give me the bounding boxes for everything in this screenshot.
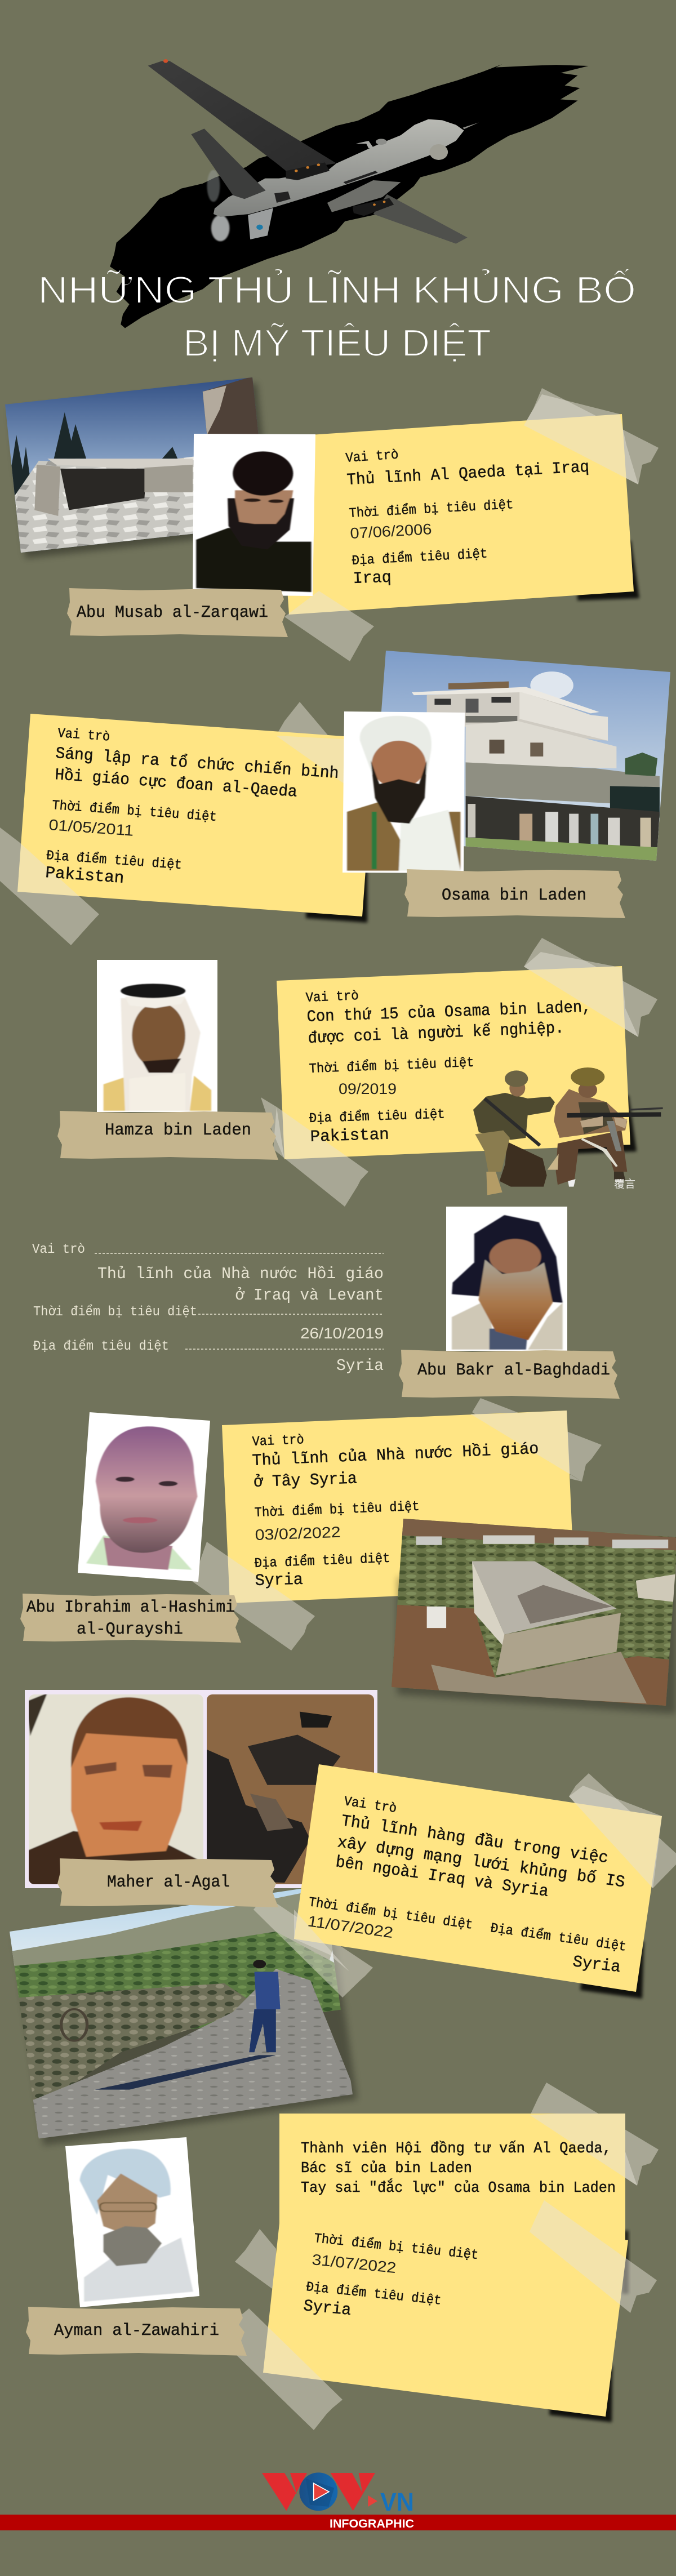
panel: Ayman al-Zawahiri [26,2083,659,2430]
upper sticky note [279,2114,637,2294]
panel: Abu Bakr al-Baghdadi [32,1207,620,1399]
note text: Thời điểm bị tiêu diệt [309,1055,474,1077]
header: drone illustration [110,59,589,328]
portrait [97,960,217,1112]
note text: Thời điểm bị tiêu diệt [51,798,217,825]
tape [472,1398,602,1481]
note text: Vai trò [343,1794,398,1817]
note text: Syria [303,2297,352,2320]
tape [530,2083,659,2186]
name label [20,1594,241,1643]
photo: road [0,1880,371,2146]
note text: Sáng lập ra tổ chức chiến binh [55,744,339,783]
panel: Abu Musab al-Zarqawi [0,372,659,661]
note text: được coi là người kế nghiệp. [308,1019,564,1048]
note text: Vai trò [345,447,399,466]
name label: Abu Ibrahim al-Hashimi [26,1598,235,1617]
tape [284,591,374,661]
note text: Thời điểm bị tiêu diệt [308,1894,474,1933]
note text [305,989,592,1146]
note text: Vai trò [57,726,110,745]
sticky note [261,952,638,1159]
note text: 09/2019 [339,1080,397,1097]
portrait [65,2137,199,2307]
drone [148,59,479,244]
details text: Syria [336,1356,384,1375]
title: NHỮNG THỦ LĨNH KHỦNG BỐ [38,268,636,312]
note text: Thời điểm bị tiêu diệt [254,1499,420,1521]
details text: ở Iraq và Levant [235,1286,384,1305]
sticky note [277,394,639,615]
note text: Tay sai "đắc lực" của Osama bin Laden [301,2178,616,2197]
note text: Pakistan [310,1125,389,1146]
name label: Abu Bakr al-Baghdadi [417,1361,610,1380]
name label: al-Qurayshi [77,1620,183,1639]
note text: Địa điểm tiêu diệt [305,2279,442,2309]
name label [399,1350,620,1399]
name label: Osama bin Laden [442,886,586,905]
brush stroke [110,64,589,328]
note text: Thành viên Hội đồng tư vấn Al Qaeda, [301,2140,611,2157]
note text: Bác sĩ của bin Laden [301,2160,472,2177]
note text: bên ngoài Iraq và Syria [335,1853,550,1901]
details text: 26/10/2019 [300,1325,384,1342]
sticky note [17,714,375,923]
details text: Thời điểm bị tiêu diệt [33,1304,197,1320]
name label [57,1858,278,1907]
note text: 31/07/2022 [311,2251,397,2276]
name label: Maher al-Agal [107,1873,230,1892]
note text: Iraq [353,568,392,588]
tape [0,827,99,945]
note text: Thủ lĩnh hàng đầu trong việc [340,1812,610,1867]
logo: VOV.VN Infographic [262,2472,414,2530]
details text [32,1242,384,1375]
tape [254,1896,373,1997]
note text: Địa điểm tiêu diệt [490,1920,627,1955]
details text: Vai trò [32,1242,85,1257]
note text: Thời điểm bị tiêu diệt [313,2231,479,2263]
sticky note [222,1411,582,1603]
name label [26,2307,247,2356]
note text [252,1432,539,1590]
note text: Địa điểm tiêu diệt [46,848,183,873]
lower sticky note [263,2197,657,2422]
tape [273,1107,368,1207]
note text: Vai trò [252,1432,304,1450]
note text: ở Tây Syria [253,1470,357,1492]
note text: Thủ lĩnh Al Qaeda tại Iraq [346,458,590,490]
portrait [343,711,465,873]
note text: Địa điểm tiêu diệt [352,546,488,569]
note text: Thời điểm bị tiêu diệt [349,497,514,522]
note text: Hồi giáo cực đoan al-Qaeda [54,766,298,802]
note text: 07/06/2006 [350,520,432,542]
name label [404,869,625,918]
tape [569,1773,676,1888]
note text: Syria [255,1570,303,1590]
note text: Địa điểm tiêu diệt [254,1551,390,1572]
photo: destroyed house [388,1516,676,1714]
details text: Thủ lĩnh của Nhà nước Hồi giáo [97,1265,384,1283]
tape [235,2229,276,2292]
note text: Vai trò [305,989,359,1006]
panel: Osama bin Laden [0,648,676,945]
note text: xây dựng mạng lưới khủng bố IS [336,1833,626,1892]
note text: Pakistan [45,864,124,888]
photo: bombed building [0,372,276,562]
details text: Địa điểm tiêu diệt [33,1338,169,1354]
tape [193,1542,315,1650]
logo: VOV.VN Infographic: VN [380,2488,414,2516]
logo: VOV.VN Infographic: INFOGRAPHIC [330,2517,414,2530]
note text: Địa điểm tiêu diệt [309,1106,445,1127]
note text: 03/02/2022 [255,1524,341,1543]
portrait [193,434,315,596]
name label: Ayman al-Zawahiri [54,2321,219,2341]
photo: compound [379,648,676,863]
note text [345,447,590,588]
photo frame [25,1690,379,1888]
note text [45,726,339,888]
note text [306,1794,627,1977]
panel: Hamza bin Laden [57,938,663,1207]
portrait [446,1207,567,1351]
sticky note [294,1764,662,1999]
name label [57,1111,278,1160]
tape [220,2308,343,2430]
title: BỊ MỸ TIÊU DIỆT [183,322,491,364]
note text: Syria [572,1952,621,1977]
panel: Abu Ibrahim al-Hashimi al-Qurayshi [20,1398,676,1714]
note text [301,2140,616,2320]
portrait [78,1412,210,1582]
note text: Thủ lĩnh của Nhà nước Hồi giáo [252,1440,539,1470]
footer bar [0,2515,676,2530]
note text: Con thứ 15 của Osama bin Laden, [306,998,592,1026]
tape [524,938,657,1037]
watermark: 覆言 [614,1178,635,1190]
title [38,268,636,364]
tape [524,388,659,484]
name label: Hamza bin Laden [105,1121,251,1140]
name label [67,588,288,637]
note text: 01/05/2011 [48,816,134,839]
soldiers image [473,1067,663,1195]
tape [276,702,349,789]
note text: 11/07/2022 [306,1912,394,1941]
panel: Maher al-Agal [0,1690,676,2146]
name label: Abu Musab al-Zarqawi [77,603,268,622]
